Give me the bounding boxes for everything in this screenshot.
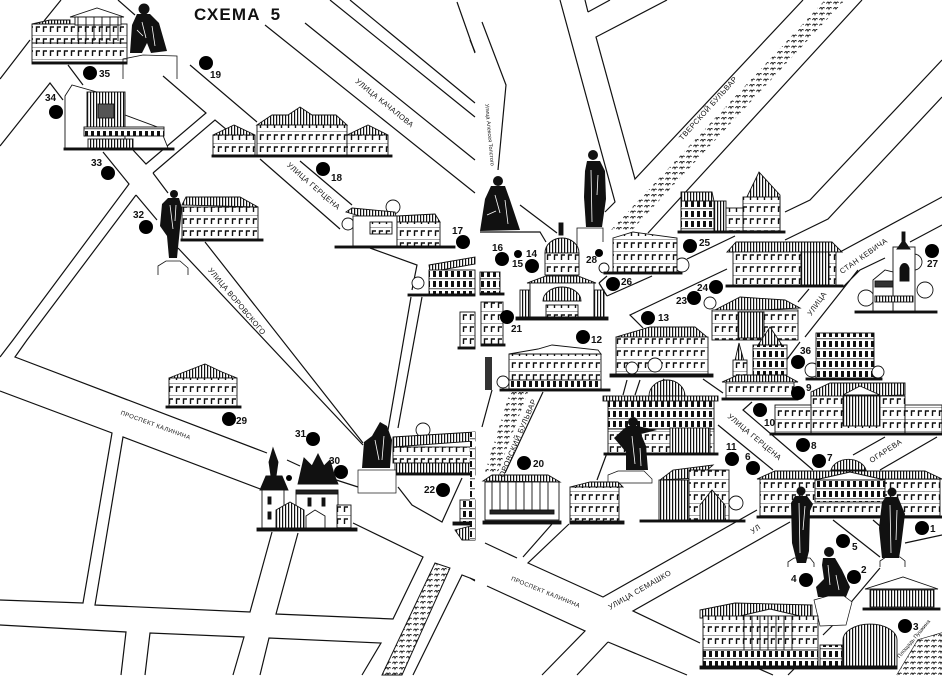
statue: seated writer — [480, 176, 546, 242]
markers right page: 28 — [586, 255, 598, 266]
statue: standing left of palace — [788, 486, 814, 567]
building: old chambers 25 — [678, 172, 785, 233]
street label: Gertsena upper: УЛИЦА ГЕРЦЕНА — [285, 161, 342, 212]
building: columned mansion 23 — [704, 297, 800, 340]
markers left page: 30 — [329, 456, 341, 467]
street label: Tverskoy boulevard: ТВЕРСКОЙ БУЛЬВАР — [677, 75, 739, 142]
markers right page: 36 — [800, 346, 812, 357]
building: church with onion domes — [257, 448, 357, 531]
building: three-part mansion — [212, 107, 392, 157]
building: fragment near 22 — [453, 500, 475, 540]
markers left page: 29 — [236, 416, 248, 427]
markers right page: 16 — [492, 243, 504, 254]
markers right page: 4 — [791, 574, 797, 585]
markers right page: 6 — [745, 452, 751, 463]
building: block 36 — [805, 333, 884, 380]
building: dark fragment 21 — [481, 302, 505, 346]
street label: Ogareva: ОГАРЕВА — [868, 437, 904, 465]
statue: seated top left — [123, 4, 177, 79]
building: bottom palace — [700, 603, 897, 669]
park strip: bottom right corner — [897, 633, 942, 675]
building: long mansion 24 — [726, 242, 843, 287]
building: octagonal chapel — [722, 327, 798, 400]
statue: seated figure at rotunda — [608, 417, 657, 483]
markers right page: 12 — [591, 335, 603, 346]
building: dark fragment 16 — [480, 272, 504, 295]
building: rotunda palace — [603, 380, 718, 455]
building: small temple — [863, 577, 940, 610]
building: small pavilion 20 — [570, 482, 624, 524]
markers left page: 19 — [210, 70, 222, 81]
road network: right page — [470, 0, 942, 675]
street label: Ul: УЛ — [749, 522, 762, 536]
statue: figure group 30 — [358, 422, 396, 493]
building: 22 — [393, 423, 475, 475]
building: mansion 29 — [166, 364, 241, 408]
park strip: lower boulevard right — [485, 392, 528, 472]
markers right page: 2 — [861, 565, 867, 576]
street label: Semashko: УЛИЦА СЕМАШКО — [607, 568, 673, 612]
road network: left page — [0, 0, 475, 675]
park strip: lower boulevard left — [382, 563, 450, 675]
building: edge fragment — [458, 312, 475, 349]
street label: Kalinina right: ПРОСПЕКТ КАЛИНИНА — [510, 576, 581, 610]
title: СХЕМА 5 — [194, 5, 281, 24]
markers right page: 11 — [726, 442, 737, 453]
park strip: Tverskoy boulevard — [611, 0, 845, 230]
street label: Ulitsa: УЛИЦА — [805, 290, 828, 317]
markers right page: 3 — [913, 622, 919, 633]
markers left page: 35 — [99, 69, 111, 80]
markers left page: 33 — [91, 158, 103, 169]
building: modern block 26 — [599, 232, 689, 274]
building: colonnade 20 — [483, 475, 561, 524]
statue: seated central monument — [814, 547, 852, 626]
markers right page: 25 — [699, 238, 711, 249]
street label: Tolstogo: Улица Алексея Толстого — [483, 104, 495, 166]
markers left page: 22 — [424, 485, 436, 496]
markers right page: 14 — [526, 249, 538, 260]
markers left page: 34 — [45, 93, 57, 104]
markers right page: 5 — [852, 542, 858, 553]
markers right page: 26 — [621, 277, 633, 288]
building: trading block 12 — [497, 345, 610, 391]
street label: Kalinina left: ПРОСПЕКТ КАЛИНИНА — [120, 411, 191, 442]
building: tenement 13 — [610, 327, 713, 377]
markers right page: 27 — [927, 259, 939, 270]
building: with statue 32 — [181, 197, 263, 241]
building: church 27 — [855, 232, 937, 313]
markers right page — [492, 238, 939, 633]
gutter: scan shadow — [470, 357, 492, 540]
markers right page: 13 — [658, 313, 670, 324]
markers right page: 21 — [511, 324, 523, 335]
markers right page: 1 — [930, 524, 936, 535]
markers right page: 7 — [827, 453, 833, 464]
markers left page: 32 — [133, 210, 145, 221]
statue: standing right of palace — [879, 488, 905, 567]
markers left page: 18 — [331, 173, 343, 184]
street label: Stankevicha: СТАН КЕВИЧА — [838, 236, 889, 276]
building: modern theatre — [64, 85, 174, 150]
street label: Vorovskogo: УЛИЦА ВОРОВСКОГО — [206, 266, 268, 337]
street label: square: Площадь Пушкина — [896, 618, 933, 660]
markers right page: 8 — [811, 441, 817, 452]
street label: Gertsena lower: УЛИЦА ГЕРЦЕНА — [726, 412, 783, 462]
building: long palace 8 — [770, 383, 942, 435]
building: domed church 14 — [516, 223, 608, 320]
markers left page — [45, 56, 470, 497]
building: angled mansion 11 — [640, 465, 745, 522]
street label: boulevard lower: ОРОВСКИЙ БУЛЬВАР — [497, 398, 538, 479]
markers left page: 17 — [452, 226, 464, 237]
markers right page: 9 — [806, 383, 812, 394]
markers right page: 15 — [512, 259, 524, 270]
markers right page: 23 — [676, 296, 688, 307]
statue: standing monument — [577, 150, 606, 250]
building: edge of left page — [408, 257, 475, 296]
markers right page: 20 — [533, 459, 545, 470]
building: palace top left — [32, 8, 127, 64]
markers right page: 10 — [764, 418, 776, 429]
markers left page: 31 — [295, 429, 307, 440]
building: with trees 17 — [335, 200, 455, 248]
building: large palace — [757, 459, 942, 518]
street label: Kachalova: УЛИЦА КАЧАЛОВА — [354, 77, 416, 129]
markers right page: 24 — [697, 283, 709, 294]
statue: standing 32 — [158, 190, 188, 275]
